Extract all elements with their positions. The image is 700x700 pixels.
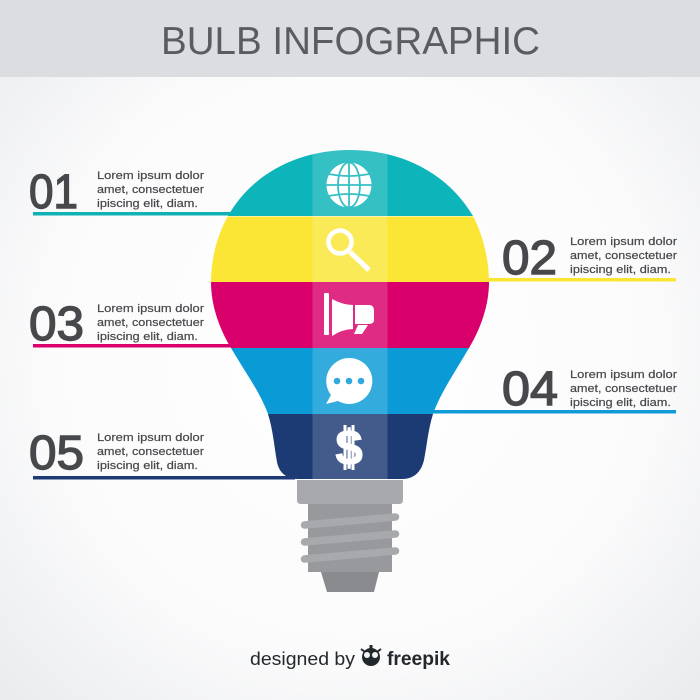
base screw body — [308, 504, 392, 572]
lamp base — [297, 480, 403, 592]
item 02 — [502, 232, 680, 285]
footer attribution — [250, 645, 450, 670]
number 01: 01 — [29, 166, 78, 219]
item 04 — [502, 363, 680, 416]
number 02: 02 — [502, 232, 557, 285]
text 03: amet, consectetuer — [97, 317, 204, 329]
icon: speech bubble — [326, 358, 372, 404]
leader line 05 — [33, 476, 295, 480]
text 04: amet, consectetuer — [570, 383, 677, 395]
text 05: ipiscing elit, diam. — [97, 460, 198, 472]
text 04: ipiscing elit, diam. — [570, 397, 671, 409]
item 01 — [29, 166, 207, 219]
icon: freepik logo — [361, 645, 381, 666]
text 01: ipiscing elit, diam. — [97, 198, 198, 210]
icon: magnifier — [328, 230, 369, 270]
icon: megaphone — [324, 293, 374, 336]
band: magenta — [200, 282, 500, 348]
text 04: Lorem ipsum dolor — [570, 369, 677, 381]
icon: dollar sign: $ — [335, 420, 363, 476]
leader line 02 — [487, 278, 676, 282]
text 05: amet, consectetuer — [97, 446, 204, 458]
band: teal — [228, 150, 473, 216]
text 05: Lorem ipsum dolor — [97, 432, 204, 444]
designed by: designed by — [250, 649, 355, 669]
item 05 — [29, 427, 207, 480]
freepik wordmark: freepik — [387, 649, 450, 670]
band: blue — [231, 348, 469, 414]
leader line 04 — [430, 410, 676, 414]
icon: globe — [326, 162, 372, 208]
number 03: 03 — [29, 298, 84, 351]
item 03 — [29, 298, 207, 351]
bulb glass — [200, 145, 500, 480]
base collar — [297, 480, 403, 504]
text 01: amet, consectetuer — [97, 184, 204, 196]
leader line 03 — [33, 344, 233, 348]
text 02: amet, consectetuer — [570, 250, 677, 262]
base tip — [321, 572, 379, 592]
center translucent stripe — [312, 145, 388, 480]
text 03: Lorem ipsum dolor — [97, 303, 204, 315]
title: BULB INFOGRAPHIC — [161, 20, 540, 63]
leader line 01 — [33, 212, 231, 216]
band: yellow — [200, 216, 500, 282]
text 02: Lorem ipsum dolor — [570, 236, 677, 248]
text 01: Lorem ipsum dolor — [97, 170, 204, 182]
band: navy — [268, 414, 433, 479]
number 04: 04 — [502, 363, 558, 416]
header band — [0, 0, 700, 77]
base threads — [304, 517, 396, 559]
text 03: ipiscing elit, diam. — [97, 331, 198, 343]
text 02: ipiscing elit, diam. — [570, 264, 671, 276]
number 05: 05 — [29, 427, 84, 480]
